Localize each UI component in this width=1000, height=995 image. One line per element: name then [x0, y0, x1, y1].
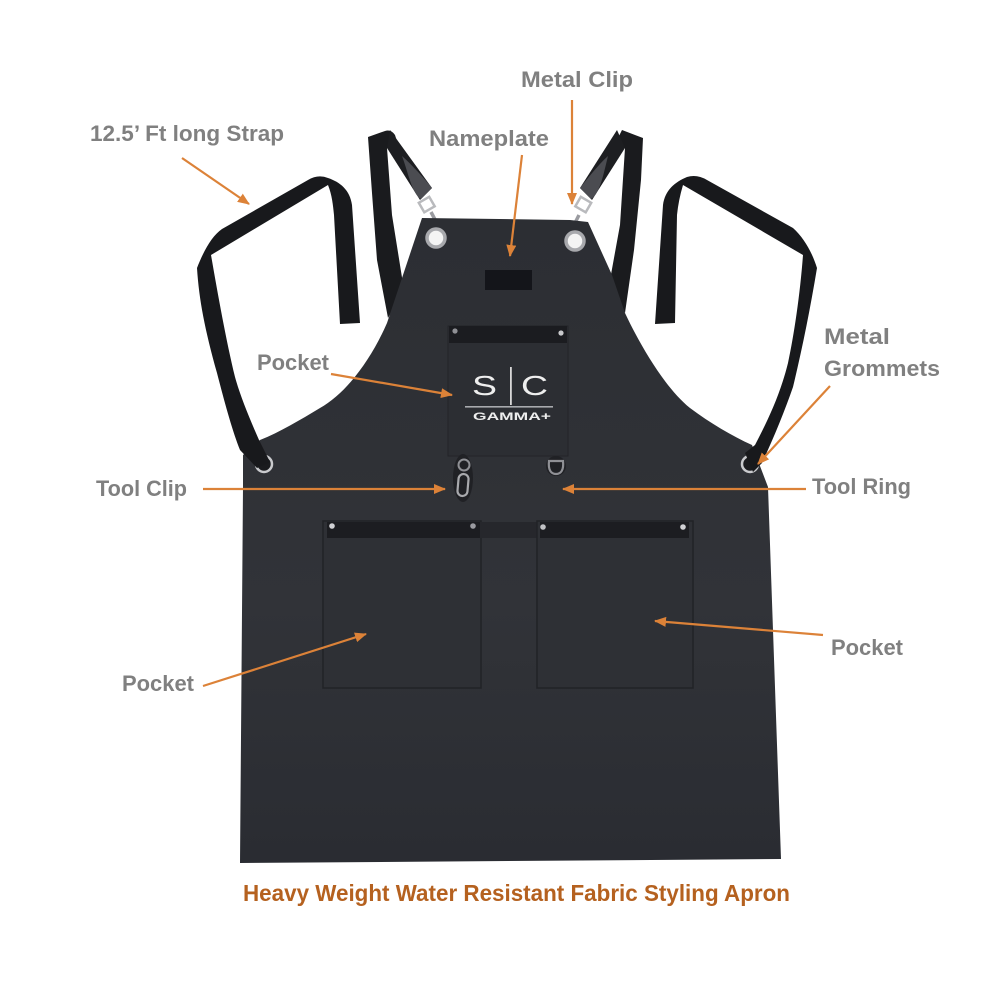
arrow: chest pocket	[331, 374, 452, 395]
label: lower right pocket: Pocket	[831, 635, 904, 660]
strap: right inner shoulder strap with leather	[570, 130, 643, 313]
label: metal grommets: Metal	[824, 324, 890, 349]
label: metal grommets	[758, 324, 940, 464]
grommet: top left	[427, 229, 445, 247]
label: metal clip	[521, 67, 633, 204]
strap: left inner shoulder strap with leather	[368, 130, 441, 318]
arrow: tool ring	[563, 488, 806, 490]
grommet: side left	[256, 456, 272, 472]
label: nameplate	[429, 126, 549, 256]
label: tool clip: Tool Clip	[96, 476, 187, 501]
arrow: lower right pocket	[655, 621, 823, 635]
chest pocket with logo: C	[521, 370, 548, 401]
apron body	[240, 218, 781, 863]
center pocket band	[480, 522, 540, 538]
label: chest pocket	[257, 350, 452, 395]
lower left pocket	[323, 521, 481, 688]
grommet: top right	[566, 232, 584, 250]
title: Heavy Weight Water Resistant Fabric Styling Apron	[243, 880, 790, 906]
label: lower left pocket: Pocket	[122, 671, 195, 696]
chest pocket with logo: GAMMA+	[473, 411, 551, 423]
arrow: metal grommets	[758, 386, 830, 464]
chest pocket with logo: S	[472, 370, 497, 401]
arrow: strap	[182, 158, 249, 204]
label: strap: 12.5’ Ft long Strap	[90, 121, 284, 146]
strap: left outer long strap	[197, 176, 360, 468]
icon: tool clip	[453, 454, 473, 502]
label: strap	[90, 121, 284, 204]
label: metal grommets: Grommets	[824, 356, 940, 381]
arrow: metal clip	[571, 100, 573, 204]
grommet: side right	[742, 456, 758, 472]
lower right pocket	[537, 521, 693, 688]
label: lower right pocket	[655, 621, 904, 660]
strap: right outer long strap	[655, 176, 817, 472]
label: lower left pocket	[122, 634, 366, 696]
icon: tool ring	[546, 456, 566, 476]
chest pocket with logo	[448, 326, 568, 456]
label: metal clip: Metal Clip	[521, 67, 633, 92]
label: tool ring: Tool Ring	[812, 474, 911, 499]
arrow: nameplate	[510, 155, 522, 256]
arrow: lower left pocket	[203, 634, 366, 686]
nameplate patch	[485, 270, 532, 290]
label: nameplate: Nameplate	[429, 126, 549, 151]
arrow: tool clip	[203, 488, 445, 490]
label: chest pocket: Pocket	[257, 350, 330, 375]
